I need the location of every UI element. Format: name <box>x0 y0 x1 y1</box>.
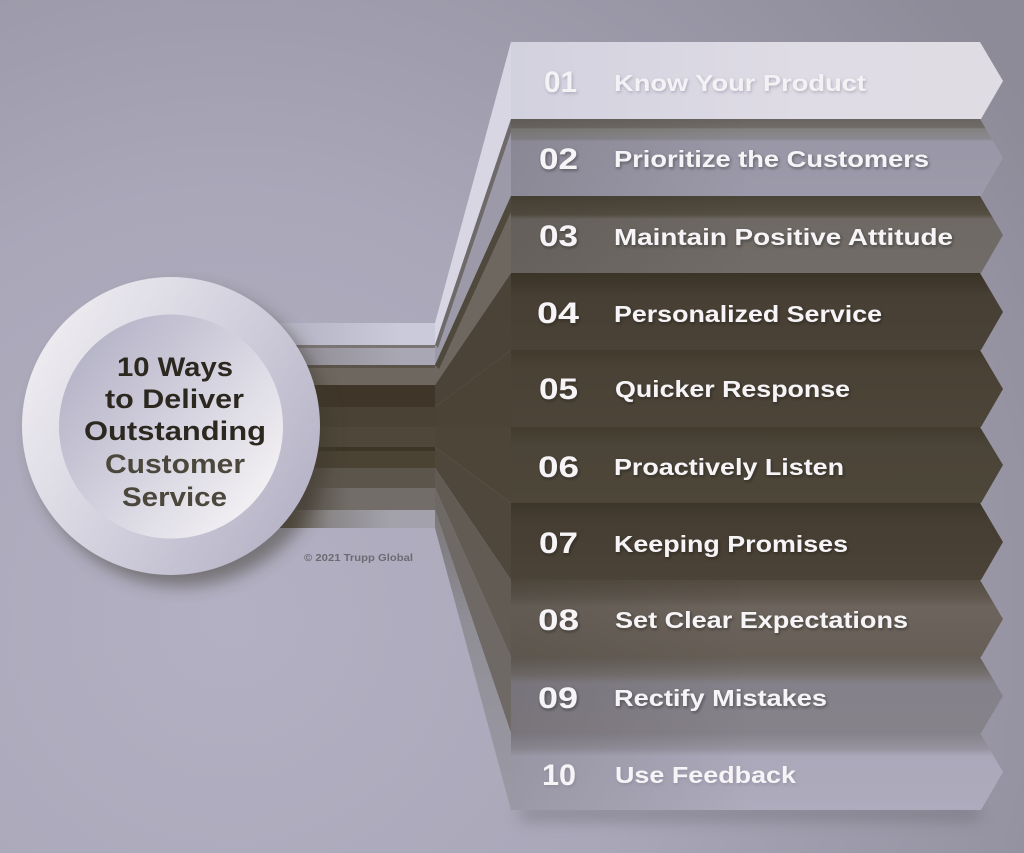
number 03: 03 <box>539 220 578 253</box>
label 02: Prioritize the Customers <box>614 146 929 172</box>
circle drop shadow <box>32 288 330 586</box>
label 07: Keeping Promises <box>614 531 848 557</box>
label 09: Rectify Mistakes <box>614 685 827 711</box>
outer ring <box>22 277 320 575</box>
band 07 <box>511 503 1003 580</box>
band 05 <box>511 350 1003 427</box>
label 05: Quicker Response <box>615 376 850 402</box>
inner disc <box>59 314 283 538</box>
number 02: 02 <box>539 143 578 176</box>
band 06 <box>511 427 1003 503</box>
number 09: 09 <box>538 682 578 715</box>
copyright: © 2021 Trupp Global <box>304 552 413 564</box>
label 03: Maintain Positive Attitude <box>614 224 953 250</box>
band 04 <box>511 273 1003 350</box>
label 04: Personalized Service <box>614 301 882 327</box>
label 10: Use Feedback <box>615 762 796 788</box>
band 09 <box>511 657 1003 733</box>
number 08: 08 <box>538 604 579 637</box>
title text <box>84 352 266 512</box>
shadow beneath the last band <box>520 806 980 820</box>
title text: to Deliver <box>105 384 245 414</box>
number 04: 04 <box>537 297 579 330</box>
band 01 <box>511 42 1003 119</box>
number 10: 10 <box>542 759 576 792</box>
label 01: Know Your Product <box>614 70 866 96</box>
number 06: 06 <box>538 451 579 484</box>
band 10 <box>511 733 1003 810</box>
band 03 <box>511 196 1003 273</box>
connector: fan to the bands <box>435 42 511 810</box>
title text: Customer <box>105 449 246 479</box>
connector: horizontal strips <box>250 323 435 528</box>
title text: Service <box>122 482 227 512</box>
number 05: 05 <box>539 373 578 406</box>
title text: Outstanding <box>84 416 266 446</box>
label 06: Proactively Listen <box>614 454 844 480</box>
number 01: 01 <box>544 66 577 99</box>
title text: 10 Ways <box>117 352 233 382</box>
label 08: Set Clear Expectations <box>615 607 908 633</box>
title circle <box>22 277 320 575</box>
band 02 <box>511 119 1003 196</box>
band 08 <box>511 580 1003 657</box>
number 07: 07 <box>539 527 578 560</box>
